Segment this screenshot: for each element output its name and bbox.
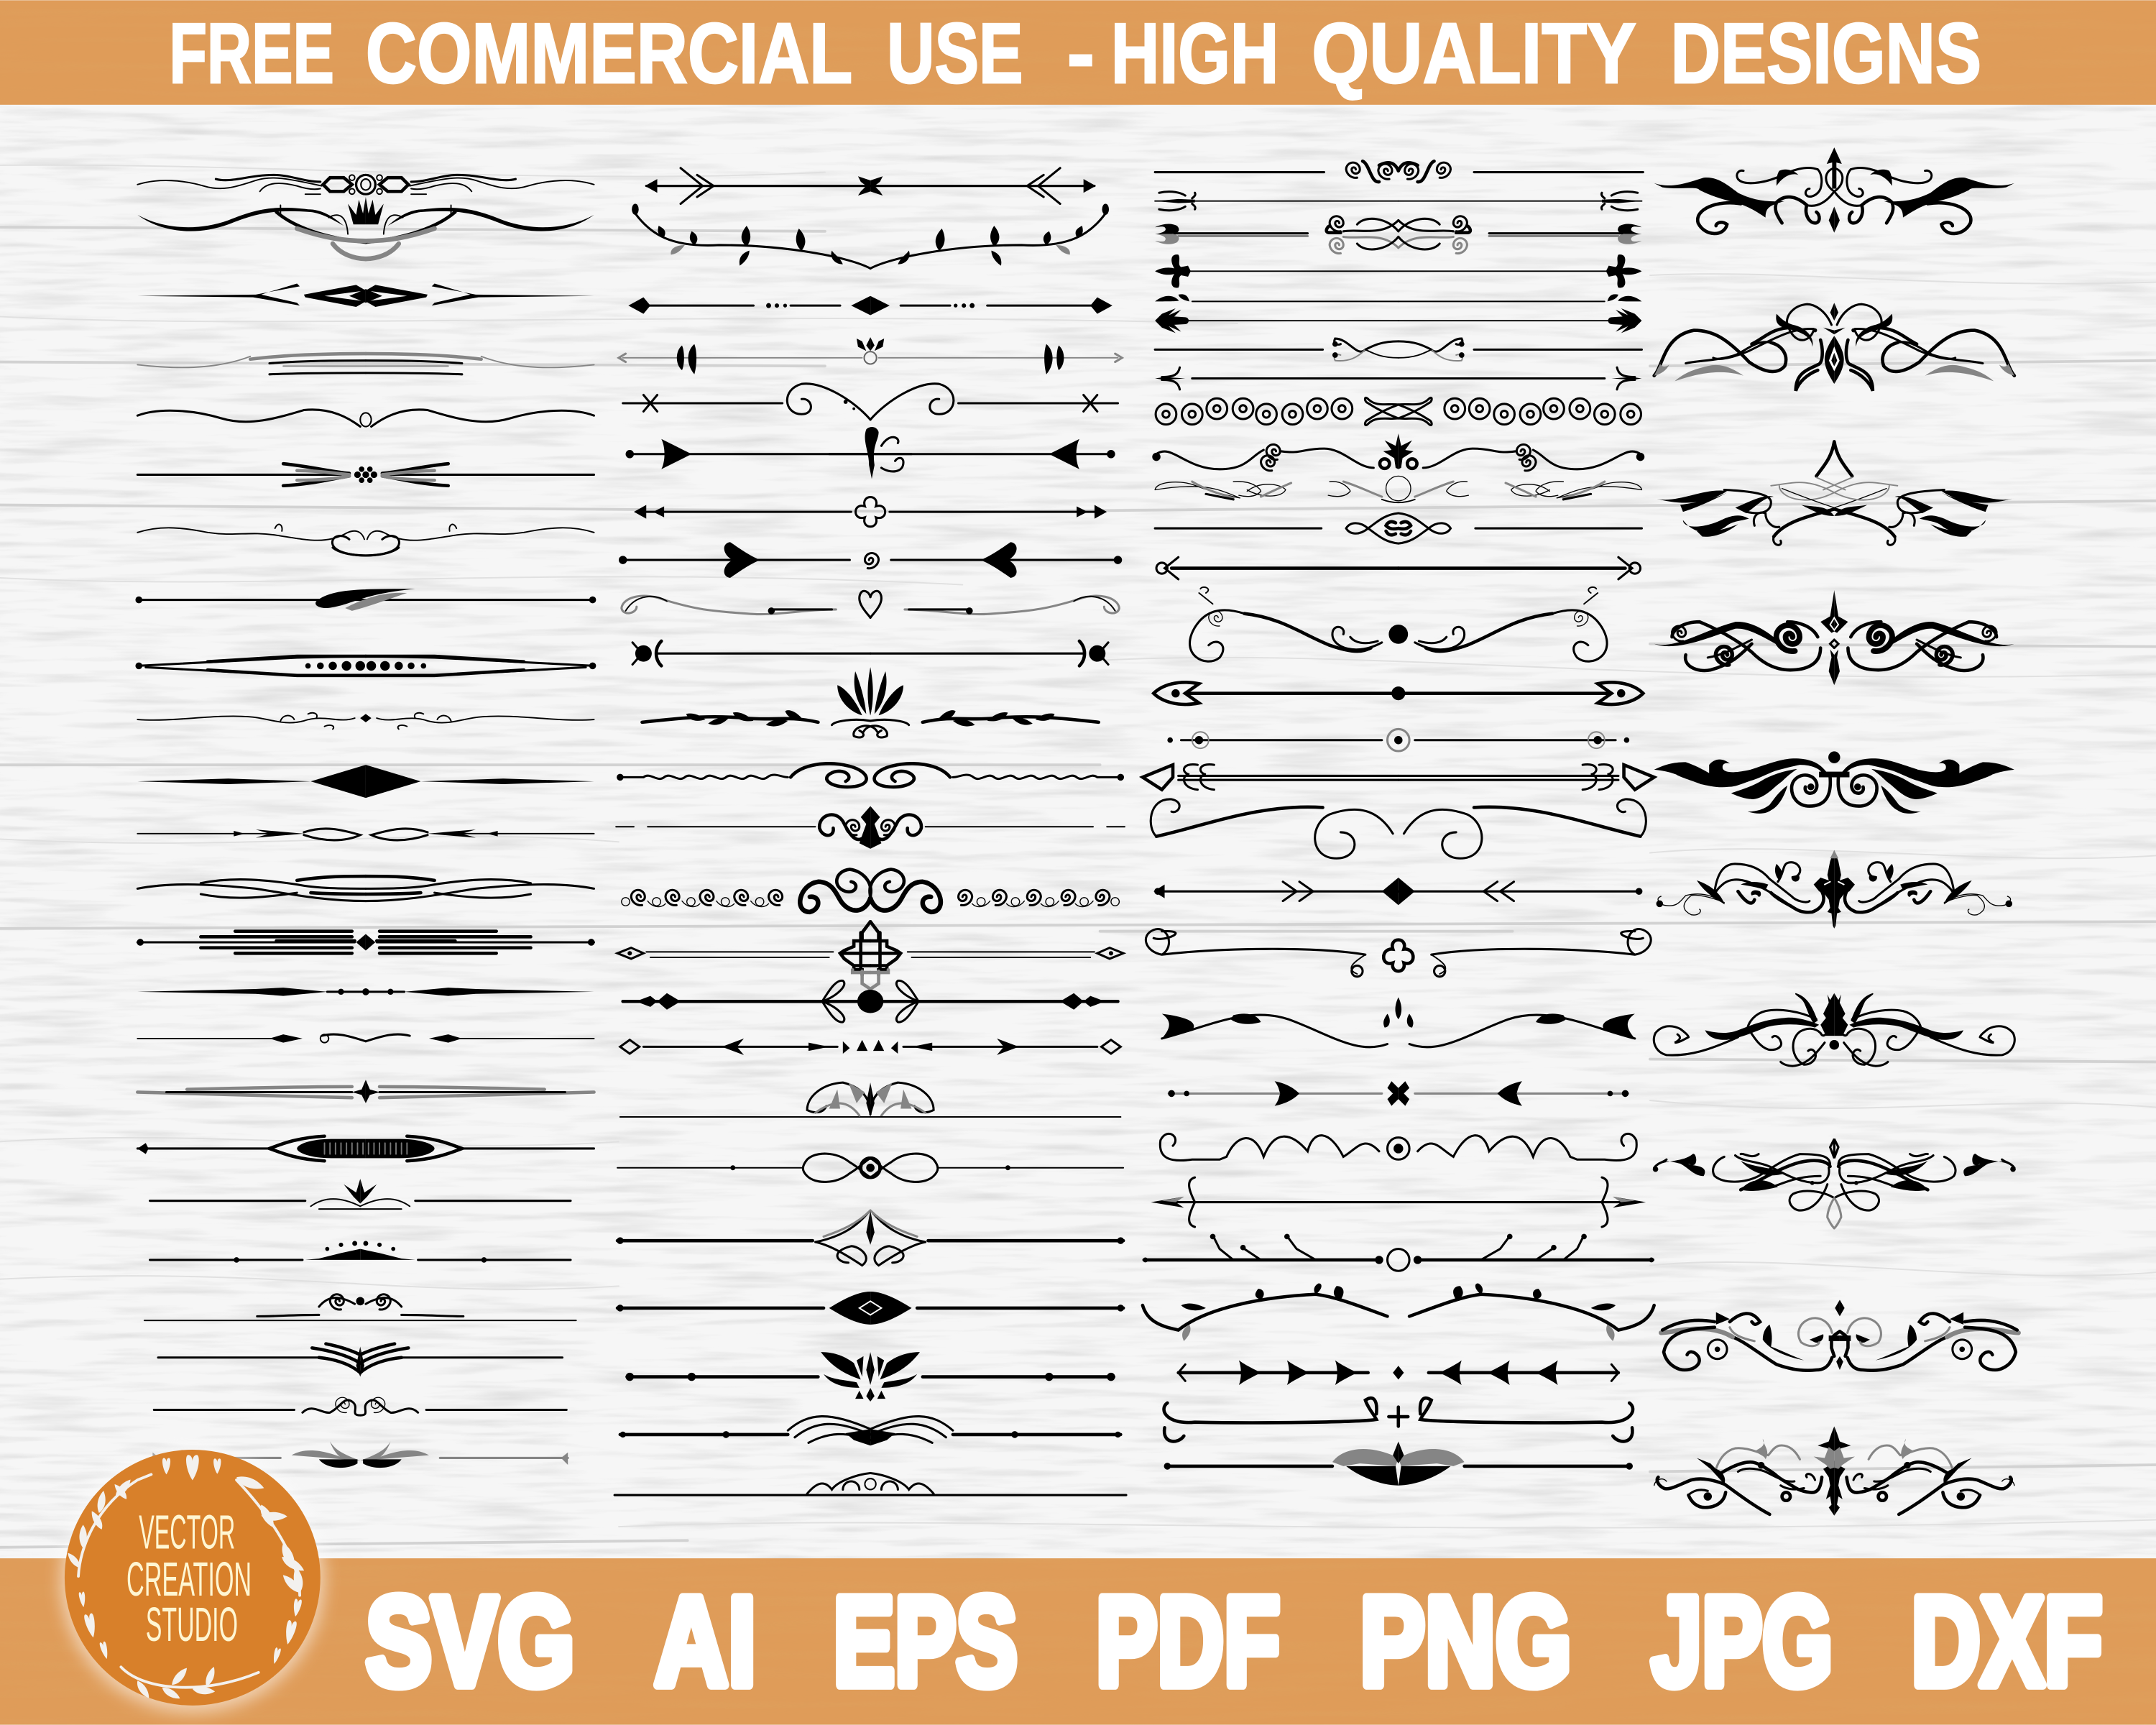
file format labels: [366, 1571, 2102, 1712]
divider 1-4: [137, 354, 594, 374]
divider 1-9: [135, 656, 596, 676]
divider 1-16: [137, 1034, 594, 1043]
ornament 4-10: [1654, 1426, 2014, 1516]
divider 3-5: [1155, 294, 1641, 301]
divider 3-4: [1155, 254, 1641, 288]
divider 2-22: [626, 1352, 1115, 1402]
divider 3-18: [1151, 799, 1646, 858]
column 3 dividers: [1143, 161, 1654, 1486]
divider 1-22: [158, 1344, 563, 1377]
divider 3-26: [1143, 1283, 1654, 1341]
divider 3-21: [1162, 998, 1635, 1047]
divider 2-7: [634, 497, 1107, 527]
banner title: -: [1067, 6, 1095, 101]
top banner: [0, 0, 2156, 105]
divider 3-20: [1146, 929, 1651, 977]
ornament 4-6: [1657, 850, 2012, 929]
divider 3-16: [1167, 729, 1629, 751]
divider 3-23: [1160, 1133, 1636, 1161]
badge text: VECTOR: [139, 1506, 235, 1560]
banner title: HIGH: [1111, 6, 1279, 101]
divider 2-18: [620, 1082, 1120, 1117]
file format labels: PNG: [1360, 1571, 1572, 1712]
divider 2-16: [623, 980, 1118, 1022]
divider 1-24: [152, 1441, 568, 1468]
divider 2-21: [617, 1292, 1124, 1325]
divider 1-21: [144, 1294, 576, 1320]
divider 1-13: [137, 876, 594, 901]
divider 2-6: [626, 427, 1115, 479]
divider 1-23: [154, 1397, 566, 1415]
file format labels: AI: [655, 1571, 756, 1712]
divider 2-2: [632, 204, 1109, 268]
divider 1-2: [137, 197, 594, 259]
divider 3-15: [1153, 682, 1643, 704]
divider 2-4: [619, 337, 1122, 374]
divider 3-19: [1153, 878, 1642, 905]
divider 2-15: [617, 921, 1123, 989]
divider 2-5: [623, 384, 1118, 420]
divider 1-18: [137, 1136, 594, 1161]
banner title: FREE: [169, 6, 334, 101]
banner title: USE: [887, 6, 1023, 101]
divider 2-1: [645, 168, 1096, 204]
badge text: [126, 1506, 252, 1652]
divider 3-24: [1151, 1177, 1646, 1227]
ornament 4-4: [1654, 590, 2014, 685]
ornament 4-1: [1654, 147, 2014, 234]
divider 3-29: [1164, 1441, 1633, 1486]
divider 1-12: [137, 829, 594, 840]
divider 3-12: [1155, 513, 1641, 543]
divider 2-24: [614, 1473, 1126, 1495]
bottom banner: [0, 1558, 2156, 1725]
divider 1-8: [135, 589, 596, 611]
file format labels: SVG: [366, 1571, 575, 1712]
divider 3-7: [1155, 339, 1641, 361]
divider 2-10: [632, 641, 1108, 666]
badge text: STUDIO: [146, 1598, 238, 1652]
divider 1-11: [137, 765, 594, 798]
divider 3-1: [1155, 161, 1643, 182]
divider 1-6: [137, 464, 594, 486]
file format labels: PDF: [1096, 1571, 1280, 1712]
divider 3-6: [1155, 308, 1641, 333]
divider 2-19: [617, 1154, 1123, 1182]
divider 3-25: [1143, 1234, 1654, 1271]
column 2 dividers: [614, 168, 1126, 1495]
divider 2-9: [622, 591, 1119, 617]
banner title: DESIGNS: [1671, 6, 1981, 101]
divider 1-5: [137, 410, 594, 426]
ornament 4-3: [1654, 442, 2014, 545]
divider 3-10: [1152, 433, 1644, 471]
divider 2-8: [619, 542, 1122, 578]
divider 3-3: [1155, 216, 1641, 254]
divider 3-9: [1156, 397, 1641, 425]
divider 2-14: [622, 870, 1119, 912]
ornament 4-7: [1654, 993, 2014, 1066]
divider 1-15: [137, 988, 594, 996]
divider 2-11: [642, 667, 1099, 737]
divider 1-19: [150, 1179, 571, 1209]
ornament 4-8: [1653, 1139, 2016, 1228]
banner title: COMMERCIAL: [366, 6, 852, 101]
divider 2-13: [616, 806, 1125, 849]
divider 3-8: [1155, 367, 1641, 390]
divider 3-22: [1168, 1081, 1628, 1106]
divider 3-14: [1190, 587, 1607, 661]
divider 1-3: [137, 284, 594, 307]
divider 3-2: [1155, 192, 1641, 211]
divider 2-20: [617, 1210, 1124, 1266]
divider 3-11: [1155, 476, 1641, 502]
file format labels: JPG: [1651, 1571, 1833, 1712]
divider 2-23: [619, 1417, 1121, 1445]
column 1 dividers: [135, 175, 596, 1468]
divider 1-10: [137, 713, 594, 729]
ornament 4-2: [1654, 303, 2014, 391]
divider 3-27: [1179, 1361, 1618, 1385]
file format labels: EPS: [833, 1571, 1018, 1712]
divider 2-3: [628, 296, 1112, 316]
divider 3-17: [1143, 765, 1654, 790]
badge text: CREATION: [126, 1552, 252, 1606]
column 4 ornaments: [1653, 147, 2019, 1516]
banner title: [169, 6, 1981, 101]
divider 1-7: [137, 525, 594, 556]
divider 3-28: [1164, 1398, 1633, 1441]
badge hearts and wreath: [68, 1455, 305, 1703]
divider 1-1: [137, 175, 594, 194]
divider 1-20: [150, 1241, 571, 1263]
ornament 4-9: [1661, 1300, 2019, 1371]
ornament 4-5: [1654, 751, 2014, 814]
divider 1-17: [137, 1080, 594, 1103]
divider 1-14: [137, 932, 594, 953]
banner title: QUALITY: [1312, 6, 1636, 101]
badge: Vector Creation Studio: [60, 1448, 325, 1712]
divider 3-13: [1156, 557, 1641, 579]
divider 2-12: [617, 763, 1124, 787]
divider 2-17: [620, 1039, 1120, 1055]
